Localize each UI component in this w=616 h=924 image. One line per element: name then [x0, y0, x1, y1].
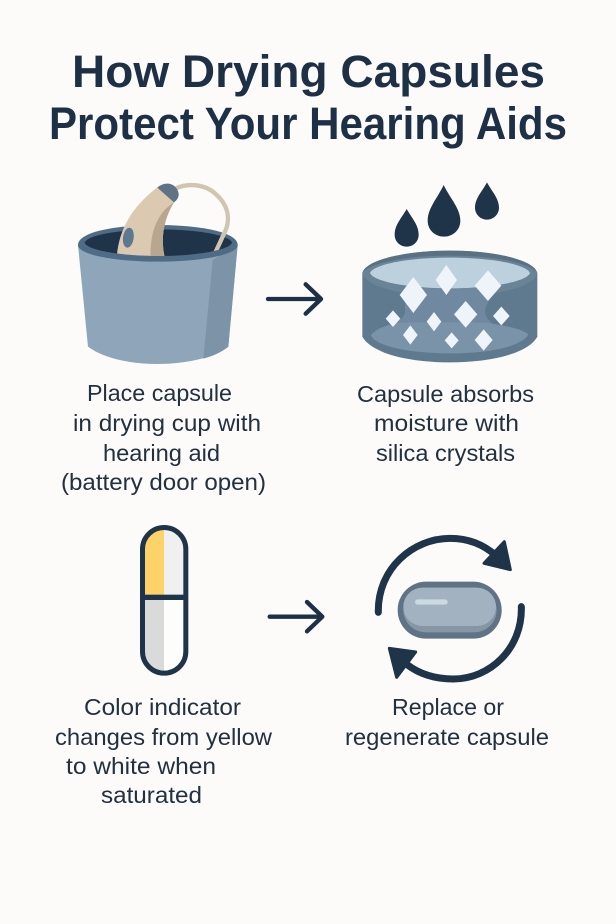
- title: [49, 46, 567, 149]
- arrow: step 1 to step 2: [268, 284, 321, 314]
- icon: drying cup with hearing aid: [78, 183, 238, 364]
- step 2 caption: moisture with: [374, 410, 519, 436]
- step 3 caption: changes from yellow: [55, 724, 272, 750]
- icon: colour indicator capsule: [142, 527, 186, 673]
- step 3 caption: [55, 694, 272, 808]
- silica crystals: [386, 265, 510, 351]
- step 2 caption: silica crystals: [376, 440, 515, 466]
- step 3 caption: Color indicator: [84, 694, 241, 720]
- icon: replace or regenerate cycle: [378, 538, 521, 679]
- step 4 caption: [345, 694, 549, 750]
- step 3 caption: to white when: [66, 753, 216, 779]
- step 1 caption: (battery door open): [61, 469, 266, 495]
- icon: capsule absorbing moisture: [362, 182, 537, 362]
- step 1 caption: Place capsule: [87, 380, 232, 406]
- step 4 caption: regenerate capsule: [345, 724, 549, 750]
- cycle arrows: [378, 538, 521, 679]
- step 1 caption: [61, 380, 266, 495]
- step 1 caption: hearing aid: [103, 440, 220, 466]
- icon: water drops: [395, 182, 499, 247]
- arrow: step 3 to step 4: [270, 602, 322, 631]
- title: How Drying Capsules: [72, 46, 545, 97]
- step 2 caption: Capsule absorbs: [357, 381, 534, 407]
- step 1 caption: in drying cup with: [73, 410, 261, 436]
- regenerating capsule: [398, 582, 502, 639]
- step 3 caption: saturated: [101, 782, 202, 808]
- title: Protect Your Hearing Aids: [49, 98, 567, 149]
- step 4 caption: Replace or: [392, 694, 504, 720]
- step 2 caption: [357, 381, 534, 466]
